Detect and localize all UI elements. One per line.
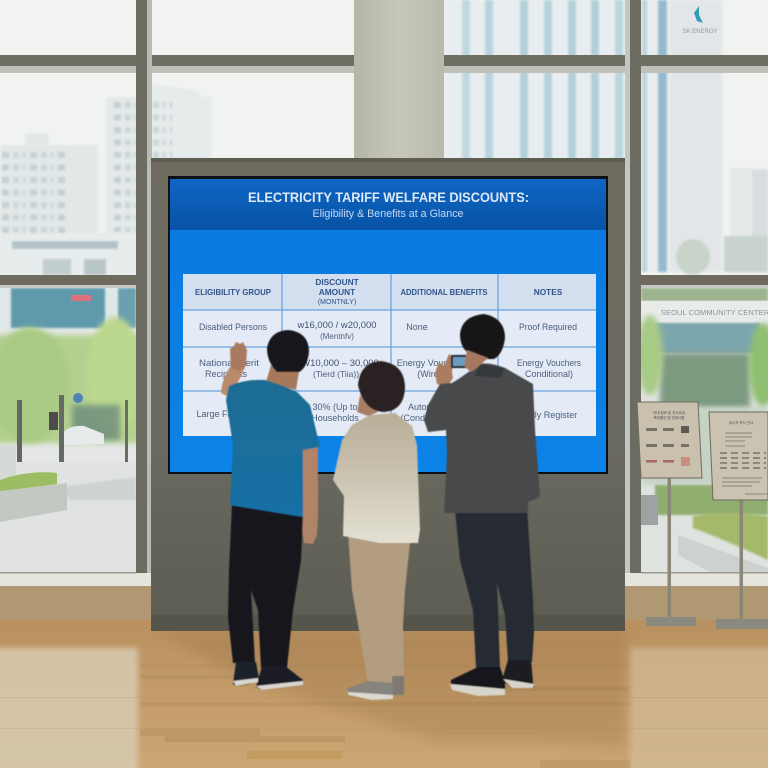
community center sign: SEOUL COMMUNITY CENTER [661,308,768,317]
screen body [170,179,606,472]
sign 1 content: 복지할인 및 안내사항 [654,415,685,420]
table body rows: Conditional) [525,369,573,379]
table header row: ELIGIBILITY GROUP [195,287,271,297]
table header row: DISCOUNT [315,277,359,287]
right street scene [637,288,768,573]
screen subtitle: Eligibility & Benefits at a Glance [312,208,464,220]
back black shoe [502,660,534,688]
dark trousers [455,508,534,668]
table header row: ADDITIONAL BENEFITS [400,287,488,297]
left apartment buildings [0,84,212,275]
window sill [0,572,768,620]
table header row: AMOUNT [319,287,355,297]
neck [266,362,300,390]
outdoor view through the windows [0,0,768,590]
concrete column [354,0,444,160]
face [357,395,378,416]
left street scene [0,288,144,573]
icon: tower logo [694,6,703,23]
head hair [460,314,505,359]
khaki trousers [348,533,410,684]
tower sign text: SK ENERGY [682,29,718,35]
grey shoes [392,676,404,695]
window frames [0,0,768,578]
standing sign 1 [637,402,702,626]
table body rows: Proof Required [519,322,577,332]
table body rows: Disabled Persons [199,322,267,332]
person: older woman in beige blouse [333,361,420,700]
table header row: NOTES [534,287,563,297]
table header row [195,277,563,306]
planter with hedge [0,445,67,522]
front black shoe [451,667,505,695]
table body rows: 30% (Up to [312,402,358,412]
table body rows: w16,000 / w20,000 [297,320,376,331]
table body rows [196,320,581,423]
table body rows: Energy Vouchers [397,358,466,368]
person: man in blue t-shirt [221,330,320,690]
right sneaker [256,666,303,690]
table body rows: Automatic [408,402,449,412]
curly hair [358,361,405,412]
right arm [298,447,318,544]
sign 1 content [646,410,690,466]
discount table [183,274,596,436]
table body rows: Energy Vouchers [517,358,581,368]
wood floor [0,620,768,768]
table body rows: (Mentnfv) [320,332,354,341]
table body rows: Households [311,413,359,423]
head hair [267,330,309,372]
neck [464,350,488,372]
grey blazer [424,364,540,513]
person: man in grey blazer with phone [424,314,540,696]
information kiosk [151,158,625,631]
standing sign 2 [709,412,768,629]
hand and phone [435,354,469,387]
floor planks [0,664,768,768]
right tower with blue window strips [445,0,768,275]
table body rows: (Tierd (Tiia)) [313,369,359,379]
raised arm and hand [221,364,245,398]
cast shadow on floor [157,631,625,748]
phone [451,355,469,368]
table body rows: Recipients [205,369,248,379]
sign 2 content [720,420,768,494]
table body rows: (Wired) [417,369,447,379]
sign 2 content: 에너지 복지 안내 [729,420,753,425]
table body rows: W10,000 – 30,000 [301,358,379,369]
black trousers [228,505,303,668]
screen header band [170,179,606,230]
table header row: (MONTNLY) [318,299,356,306]
table body rows: Large Families [196,409,256,419]
table body rows: National Merit [199,358,260,368]
table body rows: Family Register [515,410,577,420]
blue t-shirt [226,380,320,517]
left window reflection [0,648,138,768]
table body rows: (Conditional) [400,413,452,423]
right window reflection [630,648,768,768]
table body rows: None [406,322,428,332]
left sneaker [233,662,259,686]
screen title: ELECTRICITY TARIFF WELFARE DISCOUNTS: [248,189,529,205]
display screen [168,176,608,474]
sign 1 content: 안내 정보 표 전기요금 [653,410,686,415]
beige blouse [333,413,420,543]
